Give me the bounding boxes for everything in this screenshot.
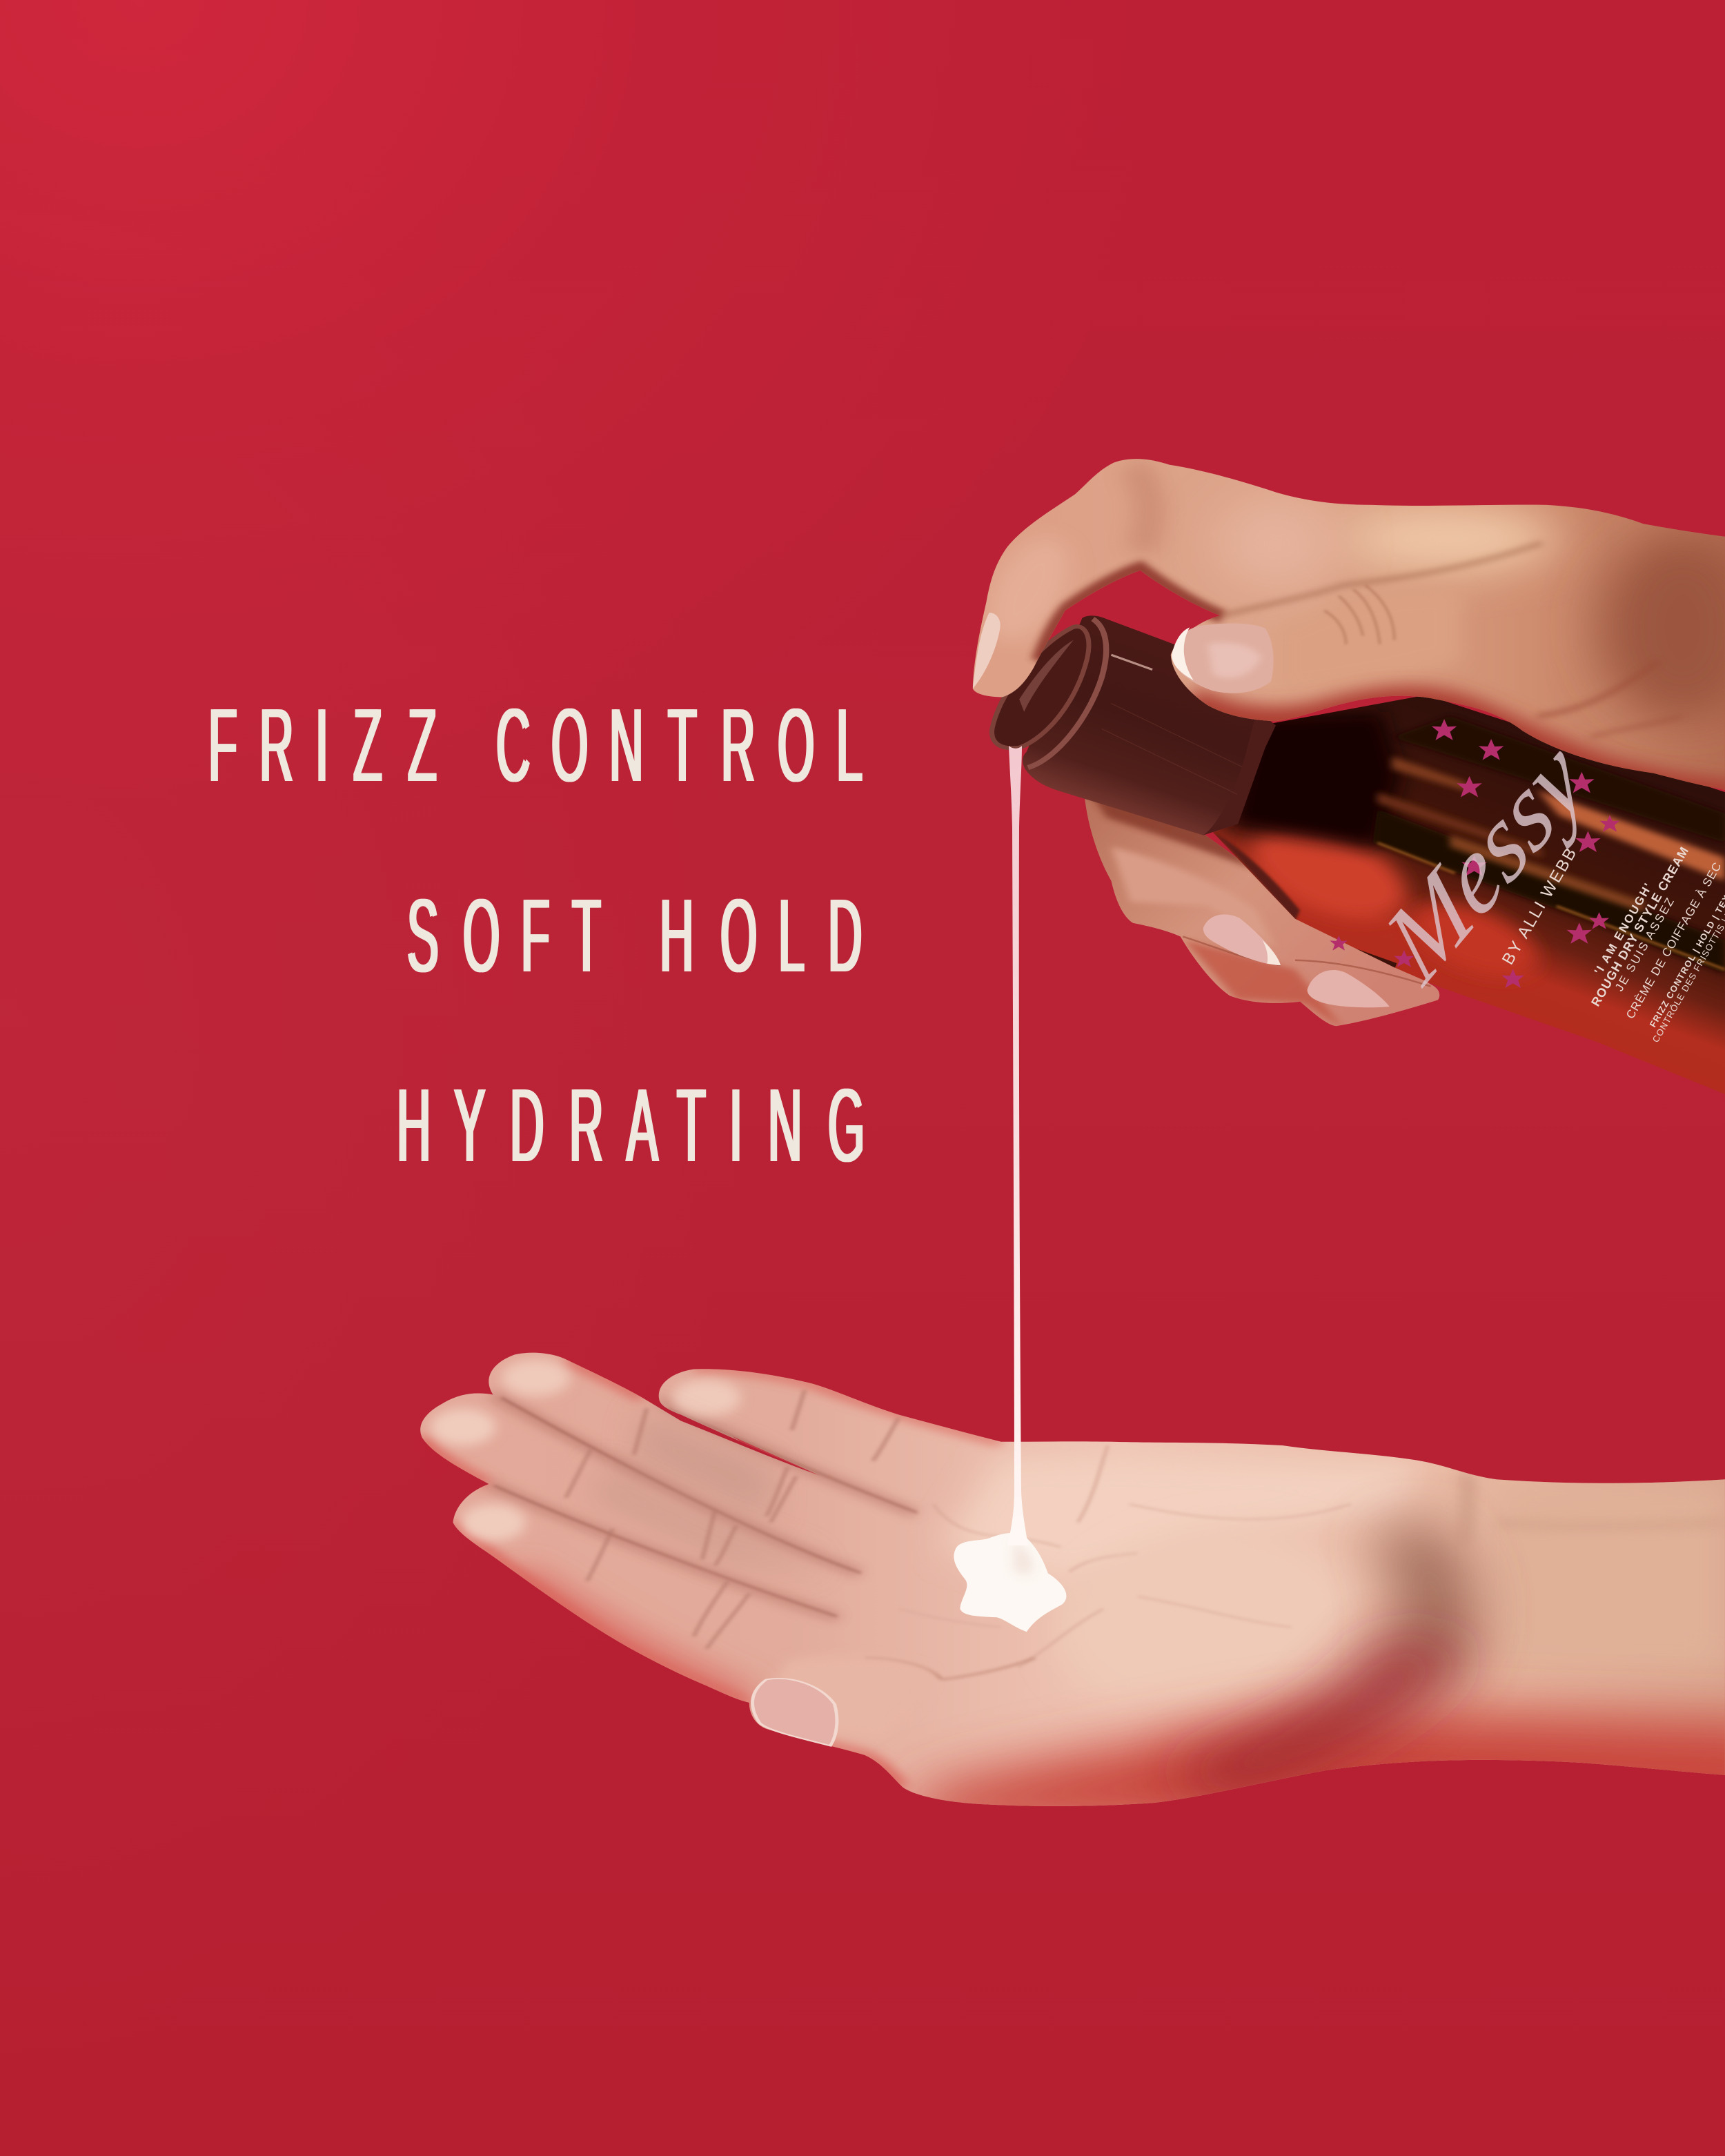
warm reflection along the lower hand [898, 1710, 1725, 1830]
text: hydrating: Y [453, 1067, 484, 1183]
thumb knuckle wrinkles [1324, 585, 1394, 644]
wrist crease [1462, 1473, 1725, 1547]
bottle cap [992, 615, 1276, 835]
text: hydrating: D [509, 1067, 542, 1183]
cap collar [1203, 712, 1276, 835]
text: soft hold: O [719, 877, 756, 993]
thumb tone [1276, 589, 1460, 695]
text: frizz control: Z [406, 686, 435, 803]
thumbnail [1172, 623, 1274, 693]
text: soft hold: L [777, 877, 803, 993]
shadow under the index finger [1038, 568, 1223, 661]
text: hydrating: I [728, 1067, 741, 1183]
ring fingernail [1308, 970, 1390, 1007]
glow through the lower bottle [1236, 808, 1422, 937]
text: frizz control: I [314, 686, 327, 803]
finger separators [489, 1395, 916, 1618]
shadow beside the thumb base [1402, 1529, 1437, 1674]
bottle label text [1366, 713, 1725, 1045]
cream blob [954, 1533, 1066, 1632]
text: soft hold: F [519, 877, 548, 993]
cream stream [1007, 746, 1028, 1545]
text: hydrating: R [568, 1067, 602, 1183]
thumb and palm fold [865, 1658, 1035, 1679]
lower fingers behind the bottle [1085, 788, 1439, 1029]
text: hydrating: G [827, 1067, 864, 1183]
lower red reflection on the thumb [1189, 699, 1725, 796]
wrist shadow [1600, 535, 1725, 720]
text: frizz control: N [608, 686, 642, 803]
amber reflections [1537, 790, 1725, 881]
product name: 'I AM ENOUGH' [1592, 880, 1655, 977]
back of hand highlight [1343, 505, 1557, 573]
red edge glow along the outline [422, 1359, 1001, 1788]
text: hydrating: A [625, 1067, 657, 1183]
wrist tone [1496, 1485, 1725, 1670]
red gap between fingers [732, 1436, 820, 1476]
index fingernail [973, 613, 1000, 689]
thumb base highlight [1076, 1547, 1351, 1686]
palm lines [898, 1445, 1351, 1668]
fingertip highlights [502, 1359, 570, 1396]
text: frizz control [207, 686, 862, 803]
cap rim [1028, 619, 1106, 768]
French name: JE SUIS ASSEZ [1613, 894, 1677, 993]
text: soft hold: D [827, 877, 860, 993]
French type: CRÈME DE COIFFAGE À SEC [1624, 860, 1724, 1021]
bottle body [1213, 695, 1725, 1094]
lower hand holding the cream [420, 1353, 1725, 1830]
text: soft hold: S [406, 877, 437, 993]
text: frizz control: T [667, 686, 696, 803]
text: frizz control: O [550, 686, 586, 803]
text: soft hold: O [462, 877, 498, 993]
text: soft hold: H [658, 877, 692, 993]
product photo: hands, bottle and cream [420, 459, 1725, 1806]
text: hydrating [395, 1067, 864, 1183]
dark red shadow band [1197, 1643, 1423, 1784]
text: soft hold [406, 877, 861, 993]
dark reflection of the finger [1213, 832, 1300, 921]
thumb upper fold [1223, 543, 1542, 615]
middle fingernail [1203, 914, 1281, 965]
brand script: Messy [1366, 713, 1603, 1008]
cap end disc [992, 626, 1089, 748]
upper hand pressing the pump [972, 459, 1725, 796]
text: frizz control: R [720, 686, 753, 803]
text: frizz control: C [494, 686, 529, 803]
palm highlight [941, 1455, 1428, 1584]
finger shade bands [634, 1412, 771, 1523]
finger crease lines [566, 1390, 898, 1649]
index finger highlight [972, 527, 1086, 652]
text: frizz control: Z [352, 686, 381, 803]
dark stripes [1372, 809, 1725, 973]
product type: ROUGH DRY STYLE CREAM [1588, 844, 1691, 1009]
text: hydrating: N [767, 1067, 801, 1183]
text: frizz control: O [776, 686, 813, 803]
text: frizz control: F [207, 686, 236, 803]
text: hydrating: H [395, 1067, 430, 1183]
brand by-line: BY ALLI WEBB [1499, 844, 1581, 968]
stars on bottle [1330, 719, 1620, 988]
text: hydrating: T [676, 1067, 704, 1183]
dark neck [1228, 712, 1401, 849]
text: soft hold: T [571, 877, 600, 993]
text: frizz control: R [258, 686, 293, 803]
thumbnail [753, 1679, 837, 1745]
text: frizz control: L [835, 686, 861, 803]
cap highlights [1111, 655, 1152, 670]
